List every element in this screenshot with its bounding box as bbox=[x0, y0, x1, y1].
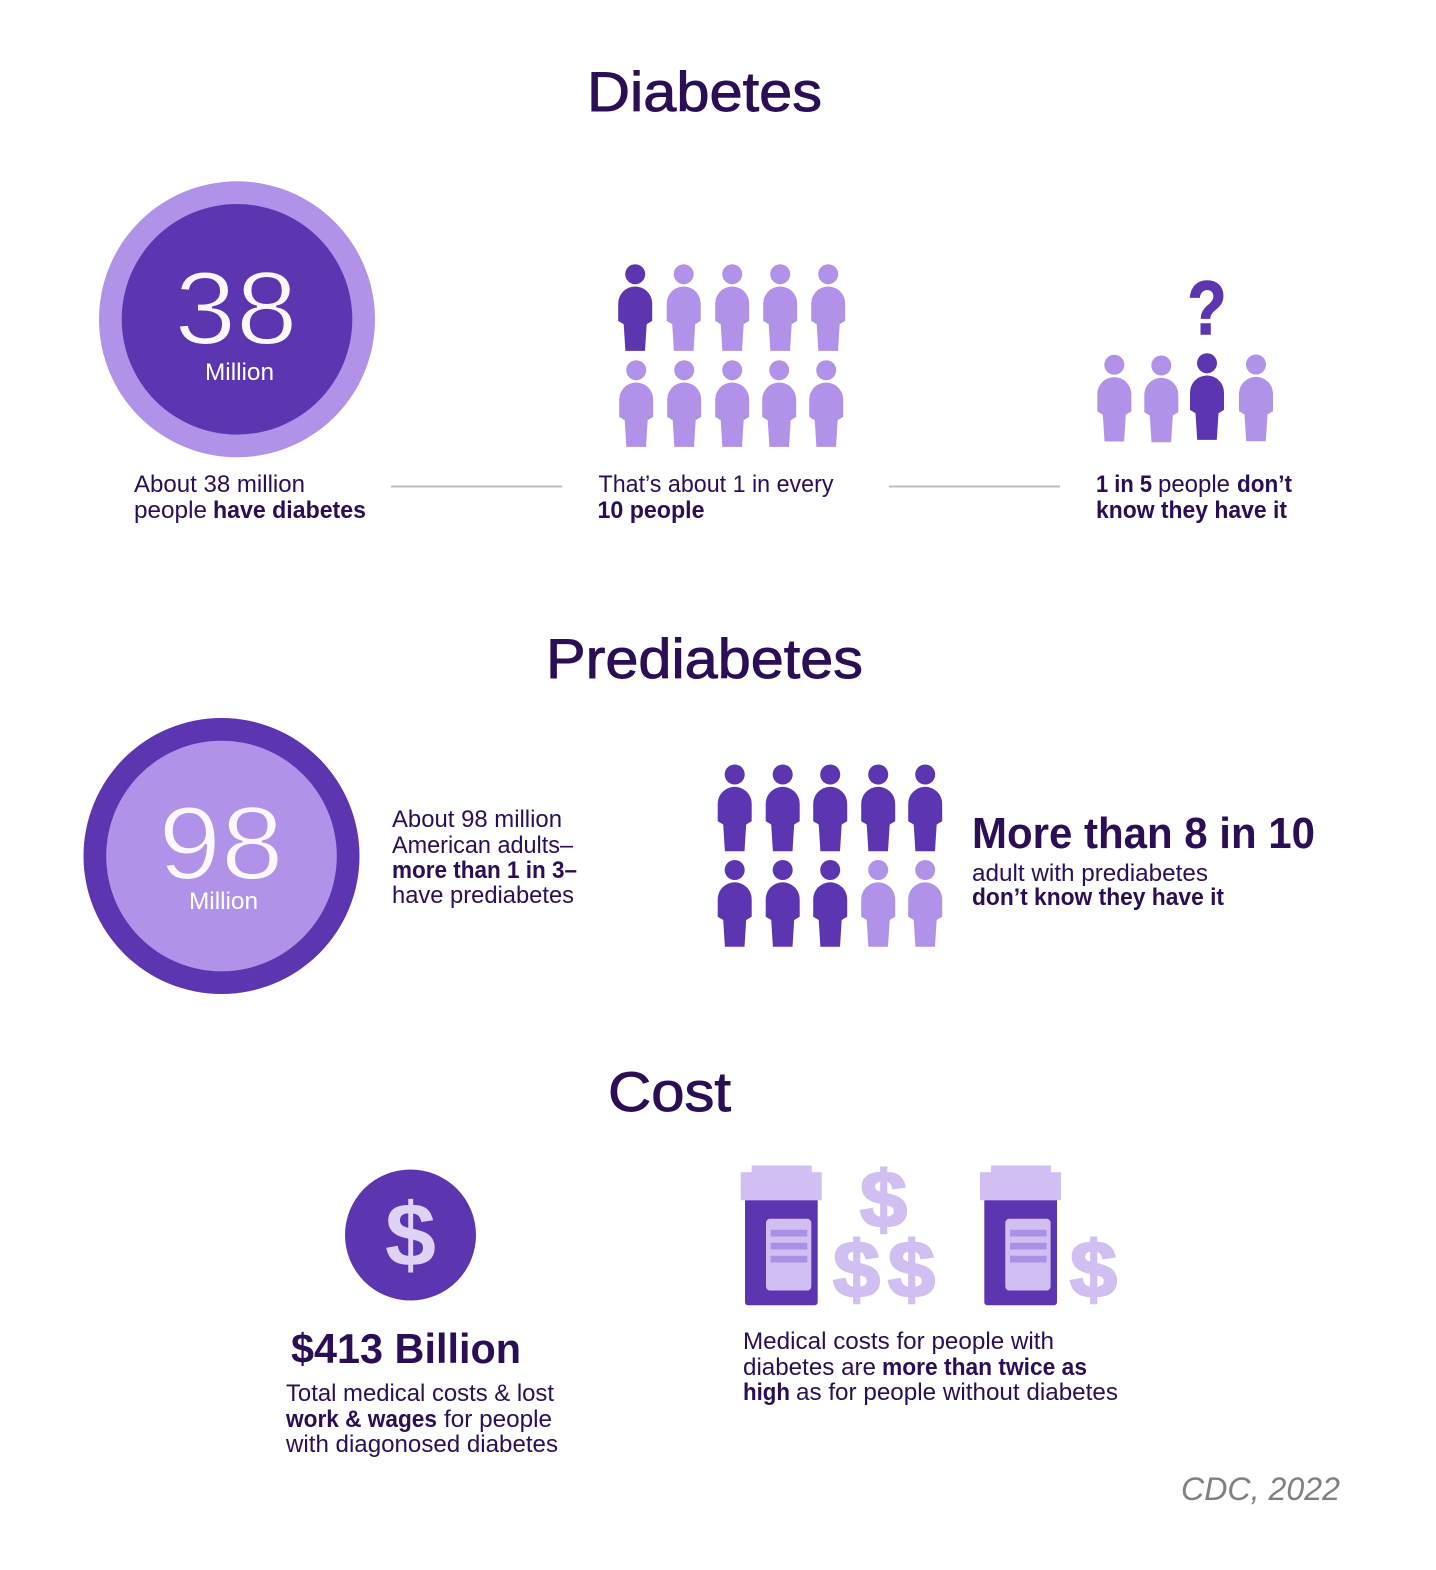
pictogram: 1 in 10 people bbox=[618, 264, 845, 447]
icon: pill bottle with three dollar signs: $ bbox=[888, 1225, 935, 1314]
icon: pill bottle with one dollar sign: $ bbox=[1070, 1225, 1117, 1314]
text: total medical costs bbox=[285, 1380, 558, 1458]
text: 1 in 5 people don't know bbox=[1096, 471, 1292, 524]
title: Cost: Cost bbox=[608, 1060, 731, 1123]
text: about 98 million American adults: About 98 million bbox=[392, 806, 562, 833]
text: 1 in 5 people don't know: 1 in 5 bbox=[1096, 471, 1152, 498]
text: about 38 million people have diabetes: have diabetes bbox=[213, 497, 366, 524]
title: Diabetes: Diabetes bbox=[587, 60, 822, 123]
text: about 1 in every 10 people bbox=[598, 471, 834, 524]
text: about 38 million people have diabetes: people bbox=[134, 497, 207, 524]
panel: 38 million circle bbox=[99, 181, 375, 457]
pictogram: 1 in 5 people unaware bbox=[1097, 353, 1273, 442]
icon: question mark: ? bbox=[1188, 266, 1226, 351]
title: Prediabetes: Prediabetes bbox=[546, 627, 863, 690]
panel: 98 million circle bbox=[84, 718, 360, 994]
panel: 38 million circle: Million bbox=[205, 359, 274, 386]
text: 1 in 5 people don't know: know they have it bbox=[1096, 497, 1287, 524]
icon: pill bottle with one dollar sign bbox=[980, 1166, 1117, 1314]
icon: dollar coin: $ bbox=[385, 1186, 436, 1286]
text: about 1 in every 10 people: 10 people bbox=[598, 497, 704, 524]
text: total medical costs: with diagonosed diabetes bbox=[285, 1431, 558, 1458]
panel: 38 million circle: 38 bbox=[174, 251, 298, 367]
text: about 98 million American adults: American adults– bbox=[392, 832, 574, 859]
text: about 98 million American adults: have prediabetes bbox=[392, 882, 574, 909]
text: total medical costs: for people bbox=[444, 1406, 552, 1433]
text: about 98 million American adults bbox=[392, 806, 577, 909]
source: CDC, 2022: CDC, 2022 bbox=[1181, 1471, 1340, 1507]
heading: more than 8 in 10: More than 8 in 10 bbox=[972, 809, 1315, 858]
text: total medical costs: work & wages bbox=[285, 1406, 437, 1433]
text: medical costs more than twice as high: diabetes are bbox=[743, 1354, 876, 1381]
text: total medical costs: Total medical costs & lost bbox=[286, 1380, 554, 1407]
text: 1 in 5 people don't know: people bbox=[1158, 471, 1230, 498]
text: about 38 million people have diabetes bbox=[134, 471, 366, 524]
icon: dollar coin bbox=[345, 1170, 476, 1300]
text: adult with prediabetes: adult with prediabetes bbox=[972, 860, 1208, 887]
text: about 1 in every 10 people: That’s about 1 in every bbox=[598, 471, 834, 498]
panel: 98 million circle: Million bbox=[189, 888, 258, 915]
text: medical costs more than twice as high: high bbox=[743, 1379, 790, 1406]
icon: pill bottle with three dollar signs bbox=[741, 1155, 935, 1314]
icon: pill bottle with three dollar signs: $ bbox=[860, 1155, 907, 1244]
text: medical costs more than twice as high: more than twice as bbox=[882, 1354, 1087, 1381]
connector line 2 bbox=[889, 486, 1060, 488]
text: 1 in 5 people don't know: don’t bbox=[1237, 471, 1292, 498]
heading: $413 Billion: $413 Billion bbox=[291, 1325, 521, 1372]
text: adult with prediabetes: don’t know they have it bbox=[972, 884, 1224, 911]
text: adult with prediabetes bbox=[972, 860, 1224, 911]
text: medical costs more than twice as high bbox=[743, 1328, 1118, 1406]
text: about 38 million people have diabetes: About 38 million bbox=[134, 471, 305, 498]
text: medical costs more than twice as high: as for people without diabetes bbox=[796, 1379, 1118, 1406]
pictogram: 8 in 10 people bbox=[718, 764, 942, 947]
connector line 1 bbox=[391, 486, 562, 488]
text: about 98 million American adults: more than 1 in 3– bbox=[392, 857, 577, 884]
panel: 98 million circle: 98 bbox=[158, 786, 284, 902]
text: medical costs more than twice as high: Medical costs for people with bbox=[743, 1328, 1054, 1355]
icon: pill bottle with three dollar signs: $ bbox=[833, 1225, 880, 1314]
